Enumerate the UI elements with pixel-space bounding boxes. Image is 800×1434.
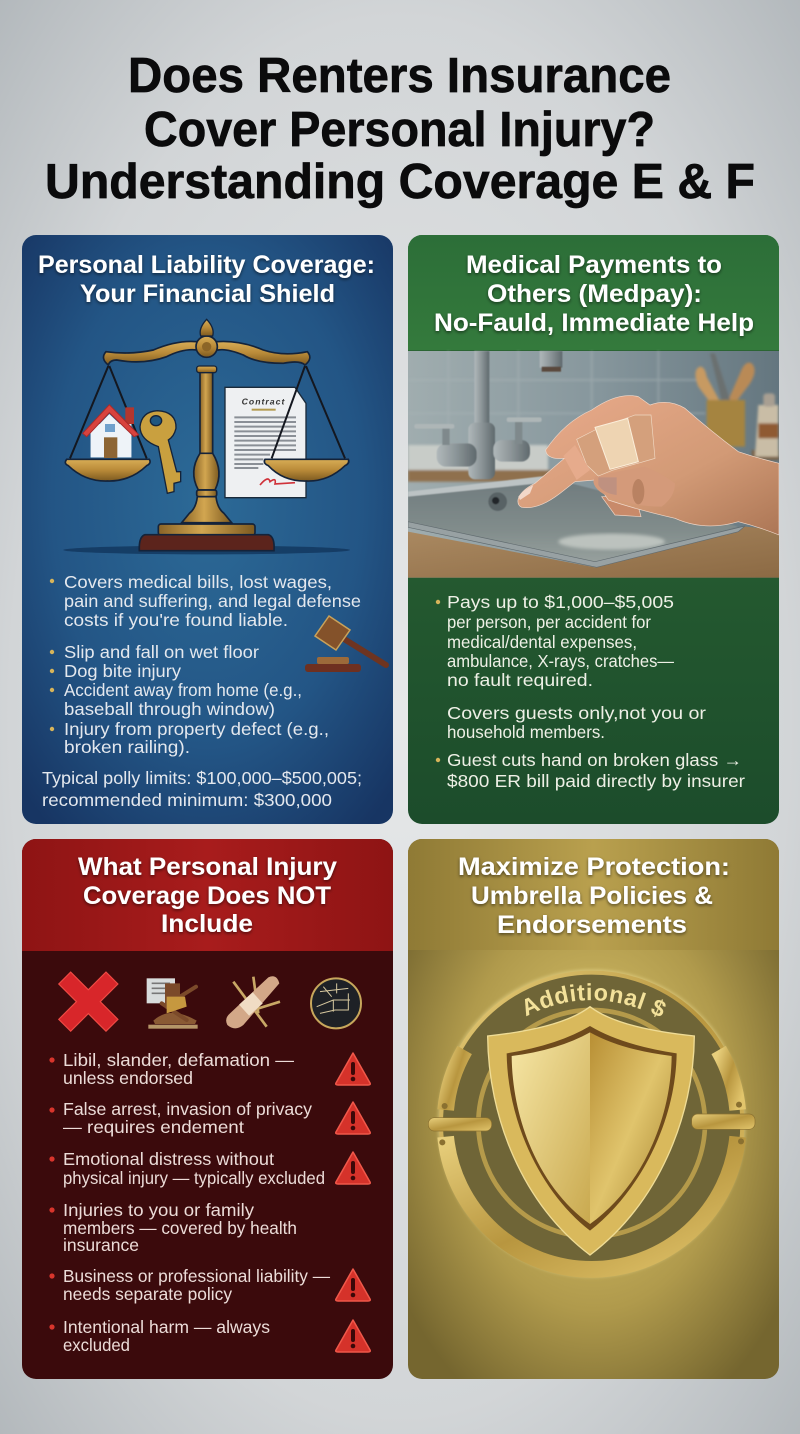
- text: exclusion list: — requires endement: [63, 1117, 244, 1137]
- icon: gavel: [305, 616, 386, 672]
- text: liability bullets: baseball through window): [64, 699, 275, 719]
- text: medpay details: no fault required.: [447, 670, 593, 690]
- heading: personal liability: Personal Liability Coverage:: [38, 251, 375, 279]
- text: medpay details: $800 ER bill paid directly by insurer: [447, 771, 745, 791]
- heading: medical payments: Medical Payments to: [466, 251, 722, 279]
- text: exclusion list: False arrest, invasion of privacy: [63, 1099, 312, 1119]
- text: exclusion list: unless endorsed: [63, 1068, 193, 1088]
- text: exclusion list: Emotional distress without: [63, 1149, 274, 1169]
- text: exclusion list: Libil, slander, defamation —: [63, 1050, 295, 1070]
- left pan: [65, 459, 150, 481]
- heading: exclusions: What Personal Injury: [78, 853, 337, 881]
- key: [140, 411, 181, 493]
- title: Cover Personal Injury?: [144, 103, 655, 157]
- lower fingers: [602, 497, 641, 517]
- title: [45, 49, 755, 209]
- text: exclusion list: [49, 1050, 330, 1355]
- heading: maximize protection: Endorsements: [497, 911, 687, 939]
- icon: bandage: [226, 976, 280, 1028]
- heading: medical payments: Others (Medpay):: [487, 280, 702, 308]
- text: exclusion list: excluded: [63, 1335, 130, 1355]
- text: exclusion list: needs separate policy: [63, 1284, 232, 1304]
- text: medpay details: Guest cuts hand on broken glass →: [447, 750, 742, 770]
- image: injured hand over sink: [408, 351, 779, 578]
- heading: personal liability: [38, 251, 375, 308]
- text: liability bullets: Injury from property defect (e.g.,: [64, 719, 329, 739]
- icon: golden shield emblem: [428, 968, 756, 1278]
- text: policy limits: [42, 768, 362, 810]
- text: liability bullets: Covers medical bills, lost wages,: [64, 572, 332, 592]
- text: exclusion list: Intentional harm — always: [63, 1317, 270, 1337]
- text: liability bullets: pain and suffering, and legal defense: [64, 591, 361, 611]
- faucet: [414, 351, 562, 479]
- pillar: [139, 368, 274, 551]
- counter: [408, 527, 779, 578]
- text: policy limits: recommended minimum: $300,000: [42, 790, 332, 810]
- text: exclusion list: physical injury — typically excluded: [63, 1168, 325, 1188]
- text: liability bullets: broken railing).: [64, 737, 190, 757]
- shield: [488, 1007, 694, 1255]
- text: medpay details: Covers guests only,not you or: [447, 703, 706, 723]
- text: medpay details: per person, per accident for: [447, 612, 651, 632]
- icons: exclusion row: [71, 976, 361, 1029]
- icon: balance scale with house, key and contract: [63, 319, 350, 554]
- text: liability bullets: Dog bite injury: [64, 661, 181, 681]
- text: exclusion list: Injuries to you or family: [63, 1200, 254, 1220]
- text: medpay details: household members.: [447, 722, 605, 742]
- panel: maximize protection: [408, 839, 779, 1379]
- text: medpay details: ambulance, X-rays, cratches—: [447, 651, 674, 671]
- heading: medical payments: No-Fauld, Immediate Help: [434, 309, 754, 337]
- heading: personal liability: Your Financial Shield: [80, 280, 335, 308]
- contract: Contract: [242, 396, 285, 406]
- text: medpay details: [436, 592, 745, 791]
- heading: exclusions: [78, 853, 337, 938]
- icons: warning triangles: [336, 1053, 370, 1352]
- text: policy limits: Typical polly limits: $100,000–$500,005;: [42, 768, 362, 788]
- text: liability bullets: Slip and fall on wet floor: [64, 642, 259, 662]
- panel: exclusions: [22, 839, 393, 1379]
- contract: [225, 387, 306, 498]
- heading: exclusions: Coverage Does NOT: [83, 882, 331, 910]
- text: liability bullets: Accident away from home (e.g.,: [64, 680, 302, 700]
- heading: maximize protection: Maximize Protection:: [458, 853, 730, 881]
- text: liability bullets: [50, 572, 361, 757]
- heading: maximize protection: Umbrella Policies &: [471, 882, 713, 910]
- text: medpay details: medical/dental expenses,: [447, 632, 637, 652]
- text: exclusion list: insurance: [63, 1235, 139, 1255]
- icon: gavel and document: [147, 978, 198, 1029]
- heading: maximize protection: [458, 853, 730, 939]
- text: liability bullets: costs if you're found liable.: [64, 610, 288, 630]
- bandage: [577, 415, 655, 476]
- house: [83, 405, 139, 458]
- sink: [408, 476, 738, 567]
- panel: medical payments: [408, 235, 779, 824]
- panel: personal liability coverage: [22, 235, 393, 824]
- title: Understanding Coverage E & F: [45, 155, 755, 209]
- icon: red X: [71, 984, 106, 1019]
- text: exclusion list: members — covered by health: [63, 1218, 297, 1238]
- kitchen backdrop: [408, 351, 779, 482]
- emblem label: Additional $: [524, 983, 666, 1018]
- hand: [518, 396, 779, 535]
- text: medpay details: Pays up to $1,000–$5,005: [447, 592, 674, 612]
- heading: medical payments: [434, 251, 754, 337]
- pan strings: [70, 366, 345, 458]
- text: exclusion list: Business or professional liability —: [63, 1266, 330, 1286]
- heading: exclusions: Include: [161, 910, 253, 938]
- icon: dark round emblem: [311, 978, 361, 1028]
- title: Does Renters Insurance: [128, 49, 671, 103]
- right pan: [264, 459, 349, 481]
- beam: [103, 341, 310, 365]
